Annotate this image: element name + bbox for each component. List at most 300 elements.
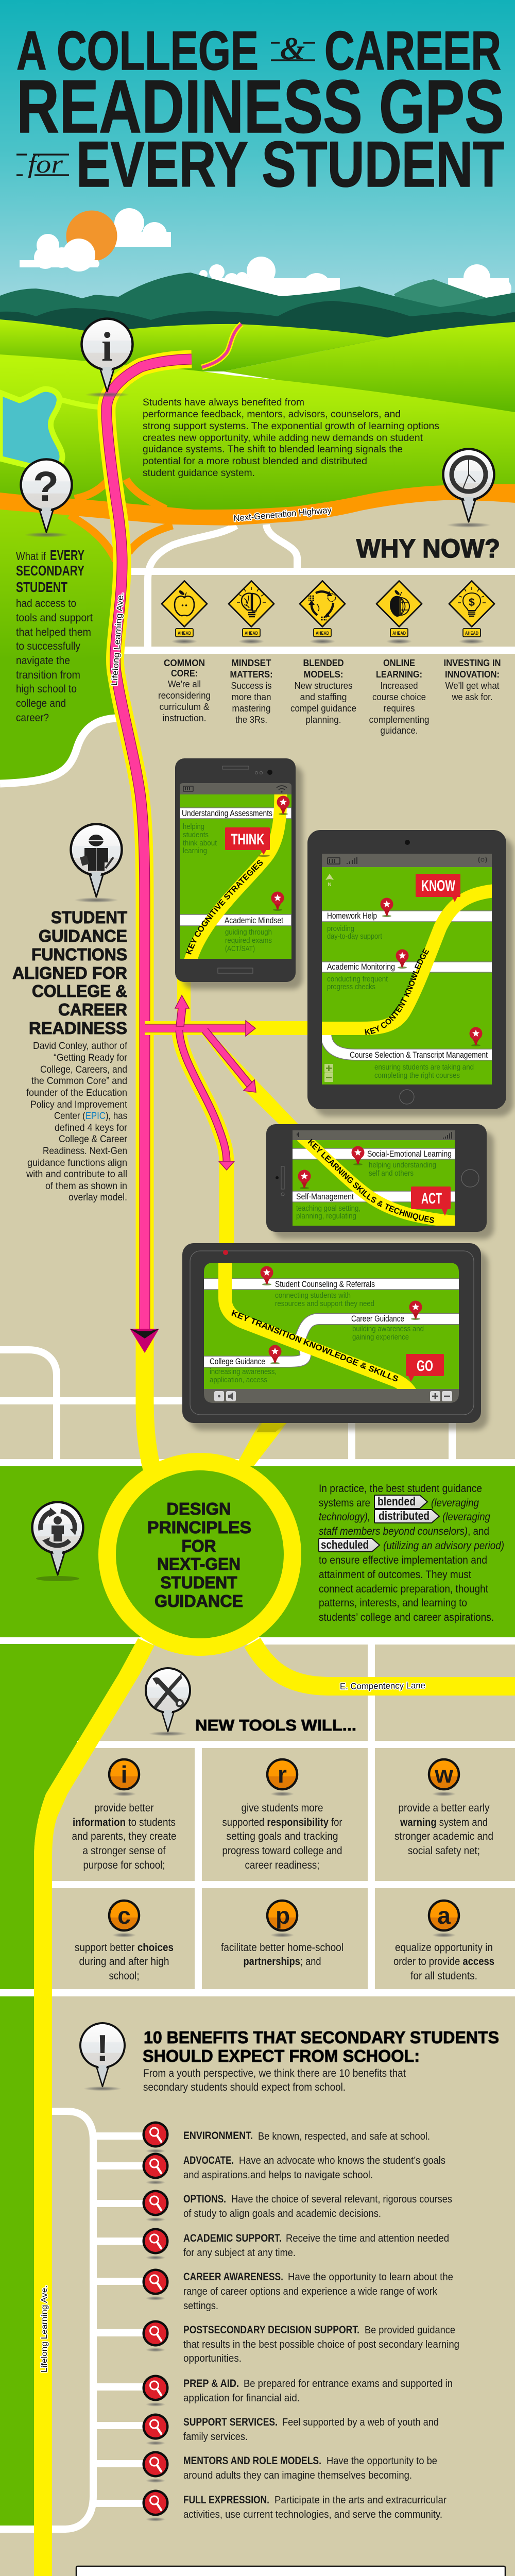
title line 3: for xyxy=(28,149,63,178)
stop: self management: teaching goal setting, xyxy=(296,1205,360,1213)
Lifelong Learning Ave road xyxy=(107,359,192,1469)
ring heading: NEXT-GEN xyxy=(157,1554,241,1573)
what if text block: to successfully xyxy=(16,640,80,652)
street label lower: Lifelong Learning Ave. xyxy=(40,2285,49,2372)
what if text block: What if xyxy=(16,550,46,563)
David Conley paragraph: David Conley, author of xyxy=(33,1041,128,1052)
why now column: blended models: BLENDED xyxy=(303,657,344,668)
benefit: postsecondary decision support: Be provided guidance xyxy=(365,2325,455,2336)
stop: college guidance xyxy=(210,1345,281,1384)
tool: partnerships xyxy=(221,1901,344,1968)
road sign: mindset xyxy=(229,581,274,644)
ring heading: PRINCIPLES xyxy=(147,1518,251,1537)
title line 1: A COLLEGE xyxy=(16,20,259,81)
benefit: advocate: ADVOCATE. xyxy=(183,2155,234,2166)
stop: academic monitoring xyxy=(327,949,409,991)
design principles paragraph xyxy=(319,1483,504,1623)
closing callout xyxy=(58,2566,505,2576)
what if text block: STUDENT xyxy=(16,579,67,595)
David Conley paragraph xyxy=(26,1041,128,1203)
title xyxy=(16,20,504,200)
what if text block xyxy=(16,547,93,724)
stop: student counseling: connecting students with xyxy=(275,1292,351,1300)
benefit: mentors and role models: around adults they can imagine themselves becoming. xyxy=(183,2470,412,2481)
why now column: mindset matters xyxy=(230,657,273,725)
tablet: know: N xyxy=(328,882,332,888)
design principles paragraph: technology), xyxy=(319,1511,370,1523)
road sign: common core xyxy=(162,581,207,644)
what if text block: EVERY xyxy=(50,547,84,563)
benefit: career awareness: range of career options and experience a wide range of work xyxy=(183,2286,438,2297)
stop: career guidance xyxy=(351,1300,424,1342)
why now column: investing: INVESTING IN xyxy=(444,657,501,668)
road label: KEY TRANSITION KNOWLEDGE & SKILLS xyxy=(231,1310,399,1382)
tool: access: a xyxy=(437,1902,451,1929)
benefit: career awareness: Have the opportunity to learn about the xyxy=(288,2272,453,2283)
why now column: blended models: and staffing xyxy=(300,692,347,702)
stop: academic monitoring: conducting frequent xyxy=(327,975,388,984)
what if text block: college and xyxy=(16,697,66,709)
benefit: postsecondary decision support: opportunities. xyxy=(183,2353,242,2364)
why now column: online learning: Increased xyxy=(380,681,418,691)
stop: understanding assessments: think about xyxy=(183,839,217,848)
what if text block: high school to xyxy=(16,683,77,695)
tool: access xyxy=(393,1901,494,1982)
street label: E. Compentency Lane xyxy=(340,1681,425,1691)
tool: responsibility: supported responsibility for xyxy=(222,1817,342,1828)
what if text block: navigate the xyxy=(16,654,70,667)
clouds behind mountains xyxy=(199,257,511,309)
benefit: postsecondary decision support xyxy=(142,2320,459,2364)
tool: choices: c xyxy=(117,1902,131,1929)
tool: partnerships: facilitate better home-school xyxy=(221,1942,344,1954)
David Conley paragraph: Readiness. Next-Gen xyxy=(43,1146,127,1157)
callout: know xyxy=(416,874,460,902)
ring heading: DESIGN xyxy=(167,1499,231,1518)
road sign: investing xyxy=(449,581,494,644)
David Conley paragraph: of them as shown in xyxy=(45,1181,127,1192)
why now column: mindset matters: MATTERS: xyxy=(230,669,273,680)
road label: KEY LEARNING SKILLS & TECHNIQUES xyxy=(307,1139,435,1223)
tag: blended: blended xyxy=(377,1495,416,1508)
why now column: online learning: LEARNING: xyxy=(376,669,422,680)
why now column: common core: instruction. xyxy=(163,713,206,723)
benefit: options: of study to align goals and academic decisions. xyxy=(183,2208,381,2219)
road label: KEY COGNITIVE STRATEGIES xyxy=(185,860,263,955)
tool: warning: social safety net; xyxy=(408,1845,480,1857)
tool: choices: support better choices xyxy=(75,1942,174,1954)
pin: question: ? xyxy=(33,463,59,510)
what if text block: tools and support xyxy=(16,612,93,624)
David Conley paragraph: College, Careers, and xyxy=(40,1064,127,1075)
benefit: environment: Be known, respected, and safe at school. xyxy=(258,2131,430,2142)
pin: exclamation xyxy=(80,2023,125,2091)
stop: social emotional learning: self and others xyxy=(369,1170,414,1178)
tool: information: a stronger sense of xyxy=(82,1845,166,1857)
benefit: career awareness: CAREER AWARENESS. xyxy=(183,2271,283,2283)
design principles paragraph: attainment of outcomes. They must xyxy=(319,1569,471,1581)
design principles paragraph: patterns, interests, and learning to xyxy=(319,1597,467,1609)
why now column: investing: We'll get what xyxy=(445,681,500,691)
foreground hill xyxy=(0,354,515,518)
David Conley paragraph: overlay model. xyxy=(68,1192,127,1203)
benefit: support services xyxy=(142,2413,439,2445)
why now column: blended models xyxy=(290,657,356,725)
stop: homework help: Homework Help xyxy=(327,911,377,921)
intro paragraph: strong support systems. The exponential growth of learning options xyxy=(143,421,439,432)
stop: course selection: Course Selection & Transcript Management xyxy=(350,1050,488,1060)
callout: think xyxy=(225,827,270,857)
ring heading: GUIDANCE xyxy=(154,1591,243,1611)
benefit: support services: Feel supported by a web of youth and xyxy=(282,2417,439,2428)
ring heading: FOR xyxy=(181,1536,216,1555)
callout: act xyxy=(411,1187,451,1216)
yellow road network xyxy=(34,1401,515,2576)
heading: student guidance functions: FUNCTIONS xyxy=(31,945,127,964)
why now column: mindset matters: more than xyxy=(232,692,271,702)
road sign: common core: AHEAD xyxy=(178,631,191,636)
benefit: mentors and role models xyxy=(142,2451,437,2483)
stop: career guidance: Career Guidance xyxy=(351,1314,404,1324)
callout: act: ACT xyxy=(421,1190,442,1207)
tablet: go xyxy=(182,1243,491,1433)
benefits intro: From a youth perspective, we think there are 10 benefits that xyxy=(143,2067,406,2079)
why now column: investing xyxy=(444,657,501,702)
pin: exclamation: ! xyxy=(96,2028,109,2069)
stop: homework help xyxy=(327,897,393,941)
road sign: investing: $ xyxy=(469,597,475,608)
David Conley paragraph: founder of the Education xyxy=(26,1088,127,1098)
intro paragraph: student guidance system. xyxy=(143,468,255,479)
benefits intro: secondary students should expect from school. xyxy=(143,2081,346,2093)
benefit: postsecondary decision support: that results in the best possible choice of post secondary learning xyxy=(183,2339,459,2350)
stop: college guidance: increasing awareness, xyxy=(210,1368,277,1376)
stop: college guidance: College Guidance xyxy=(210,1357,265,1366)
benefit: prep and aid xyxy=(142,2375,453,2406)
tool: access: for all students. xyxy=(410,1970,477,1982)
tool: warning: provide a better early xyxy=(399,1802,490,1814)
stop: academic mindset: required exams xyxy=(225,937,272,945)
branch roads to devices xyxy=(145,979,310,1247)
design principles paragraph: systems are xyxy=(319,1497,370,1509)
intro paragraph: potential for a more robust blended and distributed xyxy=(143,456,367,467)
tool: warning: stronger academic and xyxy=(394,1831,493,1842)
stop: self management: Self-Management xyxy=(296,1192,354,1201)
stop: homework help: day-to-day support xyxy=(327,933,382,941)
callout: go: GO xyxy=(417,1358,433,1375)
benefit: advocate: and aspirations.and helps to navigate school. xyxy=(183,2170,373,2181)
tool: access: equalize opportunity in xyxy=(395,1942,493,1954)
white street grid upper xyxy=(0,524,515,1463)
stop: academic monitoring: progress checks xyxy=(327,983,375,991)
what if text block: SECONDARY xyxy=(16,563,84,579)
stop: student counseling: resources and support they need xyxy=(275,1300,374,1308)
stop: career guidance: gaining experience xyxy=(352,1333,409,1342)
pin: clock xyxy=(443,449,494,528)
benefit: environment xyxy=(142,2122,430,2153)
why now column: common core: curriculum & xyxy=(160,702,209,712)
tool: partnerships: p xyxy=(276,1902,290,1929)
heading: student guidance functions: STUDENT xyxy=(51,908,127,927)
stop: academic mindset xyxy=(225,891,284,953)
tool: information: purpose for school; xyxy=(83,1859,165,1871)
callout: think: THINK xyxy=(231,831,265,848)
why now column: investing: we ask for. xyxy=(452,692,492,702)
why now column: blended models: New structures xyxy=(295,681,352,691)
what if text block: transition from xyxy=(16,669,80,681)
benefit: full expression: FULL EXPRESSION. xyxy=(183,2494,269,2506)
tool: responsibility: setting goals and tracking xyxy=(227,1831,338,1842)
heading: student guidance functions: COLLEGE & xyxy=(32,981,127,1001)
benefit: full expression: activities, use current technologies, and serve the community. xyxy=(183,2509,442,2520)
benefit: academic support: Receive the time and attention needed xyxy=(286,2233,449,2244)
tool: partnerships: partnerships; and xyxy=(243,1956,321,1968)
tool: warning xyxy=(394,1759,493,1857)
stop: social emotional learning: helping understanding xyxy=(369,1161,436,1170)
street below band xyxy=(0,1637,515,1645)
benefit: options: OPTIONS. xyxy=(183,2193,226,2205)
design principles paragraph: (leveraging xyxy=(442,1511,490,1523)
why now column: online learning xyxy=(369,657,430,736)
stop: homework help: providing xyxy=(327,925,354,933)
why now column: blended models: compel guidance xyxy=(290,703,356,714)
intro paragraph: performance feedback, mentors, advisors, counselors, and xyxy=(143,409,401,420)
tool: information: information to students xyxy=(73,1817,176,1828)
callout: go xyxy=(406,1354,444,1382)
design principles paragraph: connect academic preparation, thought xyxy=(319,1583,488,1595)
stop: student counseling xyxy=(261,1266,375,1308)
pin: tools xyxy=(146,1668,190,1736)
heading: 10 benefits: SHOULD EXPECT FROM SCHOOL: xyxy=(143,2046,420,2065)
why now column: common core: COMMON xyxy=(164,657,205,668)
pin: information: i xyxy=(101,325,113,370)
intro paragraph: creates new opportunity, while adding new demands on student xyxy=(143,433,423,444)
white street grid lower xyxy=(0,1643,515,2529)
David Conley paragraph: “Getting Ready for xyxy=(54,1053,128,1063)
why now column: mindset matters: MINDSET xyxy=(232,657,271,668)
Next-Generation Highway xyxy=(0,479,515,561)
stop: academic mindset: guiding through xyxy=(225,928,272,937)
stop: social emotional learning: Social-Emotional Learning xyxy=(367,1149,452,1159)
pin: student with tools xyxy=(71,824,122,903)
pin: information xyxy=(81,318,133,397)
benefit: full expression: Participate in the arts and extracurricular xyxy=(274,2495,447,2506)
design principles paragraph: to ensure effective implementation and xyxy=(319,1554,487,1566)
mountains xyxy=(0,273,515,350)
benefits intro xyxy=(143,2067,406,2093)
tool: choices xyxy=(75,1901,174,1982)
benefit: options: Have the choice of several relevant, rigorous courses xyxy=(231,2194,452,2205)
why now column: mindset matters: the 3Rs. xyxy=(235,715,267,725)
heading: new tools will: NEW TOOLS WILL... xyxy=(195,1716,356,1734)
sky background xyxy=(0,0,515,361)
road end arrowhead xyxy=(130,1329,159,1353)
road from tablet to ring xyxy=(235,1423,287,1467)
tool: responsibility xyxy=(222,1759,342,1871)
tool: responsibility: career readiness; xyxy=(245,1859,319,1871)
what if text block: that helped them xyxy=(16,626,91,638)
tag: scheduled: scheduled xyxy=(321,1538,369,1551)
highway xyxy=(0,479,515,561)
intro paragraph: guidance systems. The shift to blended learning signals the xyxy=(143,444,403,455)
heading: student guidance functions: ALIGNED FOR xyxy=(12,963,127,982)
why now column: mindset matters: Success is xyxy=(231,681,272,691)
why now column: common core: We're all xyxy=(168,679,201,689)
David Conley paragraph: Center (EPIC), has xyxy=(54,1111,127,1122)
benefit: prep and aid: PREP & AID. xyxy=(183,2378,239,2389)
why now column: online learning: ONLINE xyxy=(383,657,415,668)
heading: 10 benefits xyxy=(143,2028,499,2065)
heading: student guidance functions: GUIDANCE xyxy=(39,926,127,945)
stop: social emotional learning xyxy=(351,1146,452,1178)
design principles paragraph: students’ college and career aspirations. xyxy=(319,1612,494,1623)
benefit: prep and aid: Be prepared for entrance exams and supported in xyxy=(244,2378,453,2389)
lower left green field xyxy=(0,1644,138,2526)
road label: KEY CONTENT KNOWLEDGE xyxy=(365,948,430,1035)
stop: understanding assessments: students xyxy=(183,831,209,839)
zoom buttons xyxy=(324,1064,333,1082)
road sign: online learning: AHEAD xyxy=(392,631,406,636)
ring heading xyxy=(147,1499,251,1611)
tool: choices: during and after high xyxy=(79,1956,169,1968)
road sign: online learning xyxy=(376,581,422,644)
road sign: investing: AHEAD xyxy=(465,631,478,636)
pin: person with cycle arrows xyxy=(32,1502,83,1581)
benefit: academic support: for any subject at any time. xyxy=(183,2247,296,2259)
benefit: environment: ENVIRONMENT. xyxy=(183,2130,253,2142)
intro paragraph xyxy=(143,397,439,479)
tablet buttons xyxy=(214,1391,452,1401)
stop: understanding assessments: helping xyxy=(183,823,204,831)
benefit: academic support xyxy=(142,2228,449,2260)
roundabout: design principles xyxy=(107,1462,293,1647)
smartphone landscape: act xyxy=(266,1124,496,1242)
benefit: advocate: Have an advocate who knows the student’s goals xyxy=(239,2155,445,2166)
why now column: blended models: MODELS: xyxy=(304,669,343,680)
David Conley paragraph: with and contribute to all xyxy=(26,1169,127,1180)
benefit: mentors and role models: Have the opportunity to be xyxy=(327,2455,437,2467)
pin: question xyxy=(21,460,72,537)
tool: information: provide better xyxy=(95,1802,153,1814)
tool: information: i xyxy=(121,1761,127,1788)
stop: course selection: ensuring students are taking and xyxy=(374,1063,474,1072)
why now column: online learning: requires xyxy=(383,703,415,714)
why now column: online learning: complementing xyxy=(369,715,430,725)
left green field xyxy=(0,507,124,785)
highway label: Next-Generation Highway xyxy=(233,505,332,523)
stop: student counseling: Student Counseling & Referrals xyxy=(275,1279,375,1289)
benefit: advocate xyxy=(142,2153,445,2184)
stop: understanding assessments: Understanding Assessments xyxy=(182,808,272,818)
stop: academic monitoring: Academic Monitoring xyxy=(327,962,395,972)
tool: information xyxy=(72,1759,176,1871)
stop: academic mindset: (ACT/SAT) xyxy=(225,945,255,953)
why now column: online learning: course choice xyxy=(372,692,426,702)
David Conley paragraph: guidance functions align xyxy=(27,1158,127,1168)
stop: understanding assessments xyxy=(182,795,289,855)
why now column: mindset matters: mastering xyxy=(232,703,271,714)
design principles paragraph: (leveraging xyxy=(431,1497,479,1509)
tool: access: order to provide access xyxy=(393,1956,494,1968)
benefit: mentors and role models: MENTORS AND ROLE MODELS. xyxy=(183,2455,321,2467)
benefit: options xyxy=(142,2190,452,2222)
tool: information: and parents, they create xyxy=(72,1831,176,1842)
stop: self management: planning, regulating xyxy=(296,1212,356,1221)
benefit: career awareness: settings. xyxy=(183,2300,218,2312)
stop: academic mindset: Academic Mindset xyxy=(225,916,283,925)
heading: 10 benefits: 10 BENEFITS THAT SECONDARY STUDENTS xyxy=(144,2028,499,2047)
what if text block: career? xyxy=(16,711,49,724)
heading: student guidance functions xyxy=(12,908,127,1038)
heading: student guidance functions: READINESS xyxy=(29,1019,127,1038)
tool: responsibility: give students more xyxy=(241,1802,323,1814)
what if text block: had access to xyxy=(16,597,76,609)
smartphone: think xyxy=(175,758,306,992)
tool: responsibility: progress toward college and xyxy=(222,1845,342,1857)
lake xyxy=(0,389,100,470)
heading: why now: WHY NOW? xyxy=(356,534,500,563)
benefit: academic support: ACADEMIC SUPPORT. xyxy=(183,2232,282,2244)
title line 1 xyxy=(16,20,501,81)
David Conley paragraph: College & Career xyxy=(59,1134,128,1145)
stop: course selection: completing the right courses xyxy=(374,1072,460,1080)
design principles paragraph: In practice, the best student guidance xyxy=(319,1483,482,1495)
intro paragraph: Students have always benefited from xyxy=(143,397,304,408)
rolling green hills xyxy=(0,319,515,417)
sun and clouds xyxy=(20,208,171,272)
stop: understanding assessments: learning xyxy=(183,847,207,855)
benefit: support services: SUPPORT SERVICES. xyxy=(183,2416,278,2428)
design principles paragraph: (utilizing an advisory period) xyxy=(383,1540,504,1552)
why now column: blended models: planning. xyxy=(306,715,341,725)
heading: student guidance functions: CAREER xyxy=(58,1000,127,1019)
stop: course selection xyxy=(350,1027,488,1080)
why now column: common core: CORE: xyxy=(171,668,198,679)
title line 1: & xyxy=(280,31,305,66)
tag: distributed: distributed xyxy=(379,1509,430,1522)
tool: choices: school; xyxy=(109,1970,139,1982)
benefit: support services: family services. xyxy=(183,2431,248,2443)
why now column: common core: reconsidering xyxy=(158,690,211,701)
bottom street over yellow road xyxy=(34,2526,52,2533)
benefit: postsecondary decision support: POSTSECONDARY DECISION SUPPORT. xyxy=(183,2324,359,2336)
tool: warning: w xyxy=(434,1761,453,1788)
benefit: prep and aid: application for financial aid. xyxy=(183,2393,300,2404)
benefit: full expression xyxy=(142,2489,447,2521)
design principles band xyxy=(0,1466,515,1645)
callout: know: KNOW xyxy=(421,877,455,894)
why now column: common core xyxy=(158,657,211,723)
road sign: mindset: AHEAD xyxy=(245,631,258,636)
tool: warning: warning system and xyxy=(400,1817,488,1828)
why now column: investing: INNOVATION: xyxy=(445,669,500,680)
stop: career guidance: building awareness and xyxy=(352,1325,424,1333)
benefit: career awareness xyxy=(142,2269,453,2312)
road sign: blended models xyxy=(300,581,345,644)
road sign: blended models: AHEAD xyxy=(316,631,329,636)
David Conley paragraph: the Common Core” and xyxy=(31,1076,127,1087)
tablet: know xyxy=(307,830,515,1119)
stop: college guidance: application, access xyxy=(210,1376,267,1384)
why now column: online learning: guidance. xyxy=(380,725,418,736)
street label: Lifelong Learning Ave. xyxy=(110,592,126,686)
tool: responsibility: r xyxy=(278,1761,287,1788)
stop: self management xyxy=(296,1170,360,1221)
design principles paragraph: staff members beyond counselors), and xyxy=(319,1526,489,1537)
ring heading: STUDENT xyxy=(161,1573,237,1592)
David Conley paragraph: defined 4 keys for xyxy=(55,1123,128,1133)
David Conley paragraph: Policy and Improvement xyxy=(30,1099,128,1110)
